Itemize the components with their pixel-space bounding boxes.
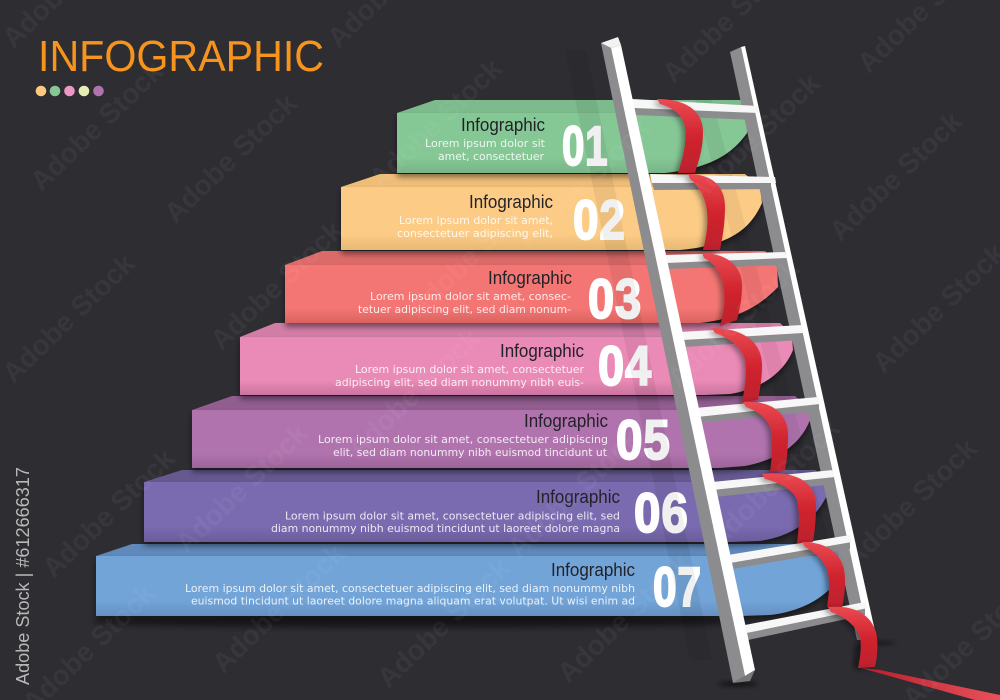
- body text 05: [318, 434, 608, 459]
- heading 05: Infographic: [524, 411, 608, 431]
- watermark: Adobe Stock: [371, 552, 516, 694]
- body text 04: Lorem ipsum dolor sit amet, consectetuer: [355, 364, 585, 376]
- ladder: [601, 37, 877, 683]
- body text 01: amet, consectetuer: [438, 151, 545, 163]
- watermark: Adobe Stock: [501, 422, 646, 564]
- step 03: red: [285, 251, 778, 330]
- side credit text: Adobe Stock | #612666317: [13, 467, 33, 685]
- number 02: 02: [573, 189, 626, 251]
- watermark: Adobe Stock: [169, 417, 314, 559]
- title: INFOGRAPHIC: [38, 32, 324, 81]
- watermark: Adobe Stock: [661, 252, 806, 394]
- body text 06: Lorem ipsum dolor sit amet, consectetuer adipiscing elit, sed: [285, 510, 620, 522]
- body text 03: [358, 291, 571, 316]
- watermark: Adobe Stock: [206, 537, 351, 679]
- ground shadows: [90, 616, 895, 686]
- watermark: Adobe Stock: [838, 432, 983, 574]
- left rail: [601, 37, 755, 683]
- watermark: Adobe Stock: [401, 182, 546, 324]
- body text 04: adipiscing elit, sed diam nonummy nibh euis-: [335, 377, 584, 389]
- step 06: violet: [144, 470, 830, 546]
- number 05: 05: [616, 409, 671, 472]
- body text 02: consectetuer adipiscing elit,: [397, 228, 553, 240]
- number 04: 04: [598, 334, 652, 397]
- watermark: Adobe Stock: [681, 67, 826, 209]
- step 02: orange: [341, 174, 762, 254]
- body text 07: euismod tincidunt ut laoreet dolore magna aliquam erat volutpat. Ut wisi enim ad: [191, 596, 635, 608]
- number 07: 07: [653, 555, 702, 618]
- watermark: Adobe Stock: [823, 105, 968, 247]
- body text 04: [335, 364, 585, 389]
- watermark: Adobe Stock: [158, 87, 303, 229]
- right rail: [730, 46, 877, 640]
- body text 02: Lorem ipsum dolor sit amet,: [399, 215, 553, 227]
- body text 07: [185, 583, 635, 608]
- heading 03: Infographic: [488, 268, 572, 288]
- body text 02: [397, 215, 553, 240]
- watermark: Adobe Stock: [204, 214, 349, 356]
- body text 07: Lorem ipsum dolor sit amet, consectetuer adipiscing elit, sed diam nonummy nibh: [185, 583, 635, 595]
- number 06: 06: [634, 482, 689, 545]
- red ribbon: [657, 99, 1000, 700]
- watermark: Adobe Stock: [24, 55, 169, 197]
- step 07: blue: [96, 544, 845, 620]
- heading 02: Infographic: [469, 192, 553, 212]
- body text 03: Lorem ipsum dolor sit amet, consec-: [370, 291, 571, 303]
- body text 01: [425, 138, 545, 163]
- body text 05: Lorem ipsum dolor sit amet, consectetuer adipiscing: [318, 434, 608, 446]
- ribbon floor strip: [861, 668, 1000, 700]
- step 01: green: [397, 100, 750, 178]
- number 01: 01: [562, 116, 608, 178]
- body text 03: tetuer adipiscing elit, sed diam nonum-: [358, 304, 571, 316]
- step 04: pink: [240, 323, 795, 399]
- ladder cast shadow: [565, 50, 850, 660]
- watermark: Adobe Stock: [701, 412, 846, 554]
- colour dots: [36, 86, 104, 96]
- step 05: purple: [192, 396, 812, 472]
- watermark: Adobe Stock: [551, 547, 696, 689]
- watermark: Adobe Stock: [36, 442, 181, 584]
- number 03: 03: [588, 267, 642, 330]
- body text 06: diam nonummy nibh euismod tincidunt ut laoreet dolore magna: [271, 523, 620, 535]
- heading 04: Infographic: [500, 341, 584, 361]
- body text 06: [271, 510, 620, 535]
- rungs: [632, 99, 868, 640]
- watermark: Adobe Stock: [0, 247, 141, 389]
- watermark: Adobe Stock: [341, 322, 486, 464]
- heading 06: Infographic: [536, 487, 620, 507]
- watermark: Adobe Stock: [511, 112, 656, 254]
- body text 01: Lorem ipsum dolor sit: [425, 138, 545, 150]
- watermark: Adobe Stock: [363, 52, 508, 194]
- heading 01: Infographic: [461, 115, 545, 135]
- body text 05: elit, sed diam nonummy nibh euismod tincidunt ut: [333, 447, 607, 459]
- heading 07: Infographic: [551, 560, 635, 580]
